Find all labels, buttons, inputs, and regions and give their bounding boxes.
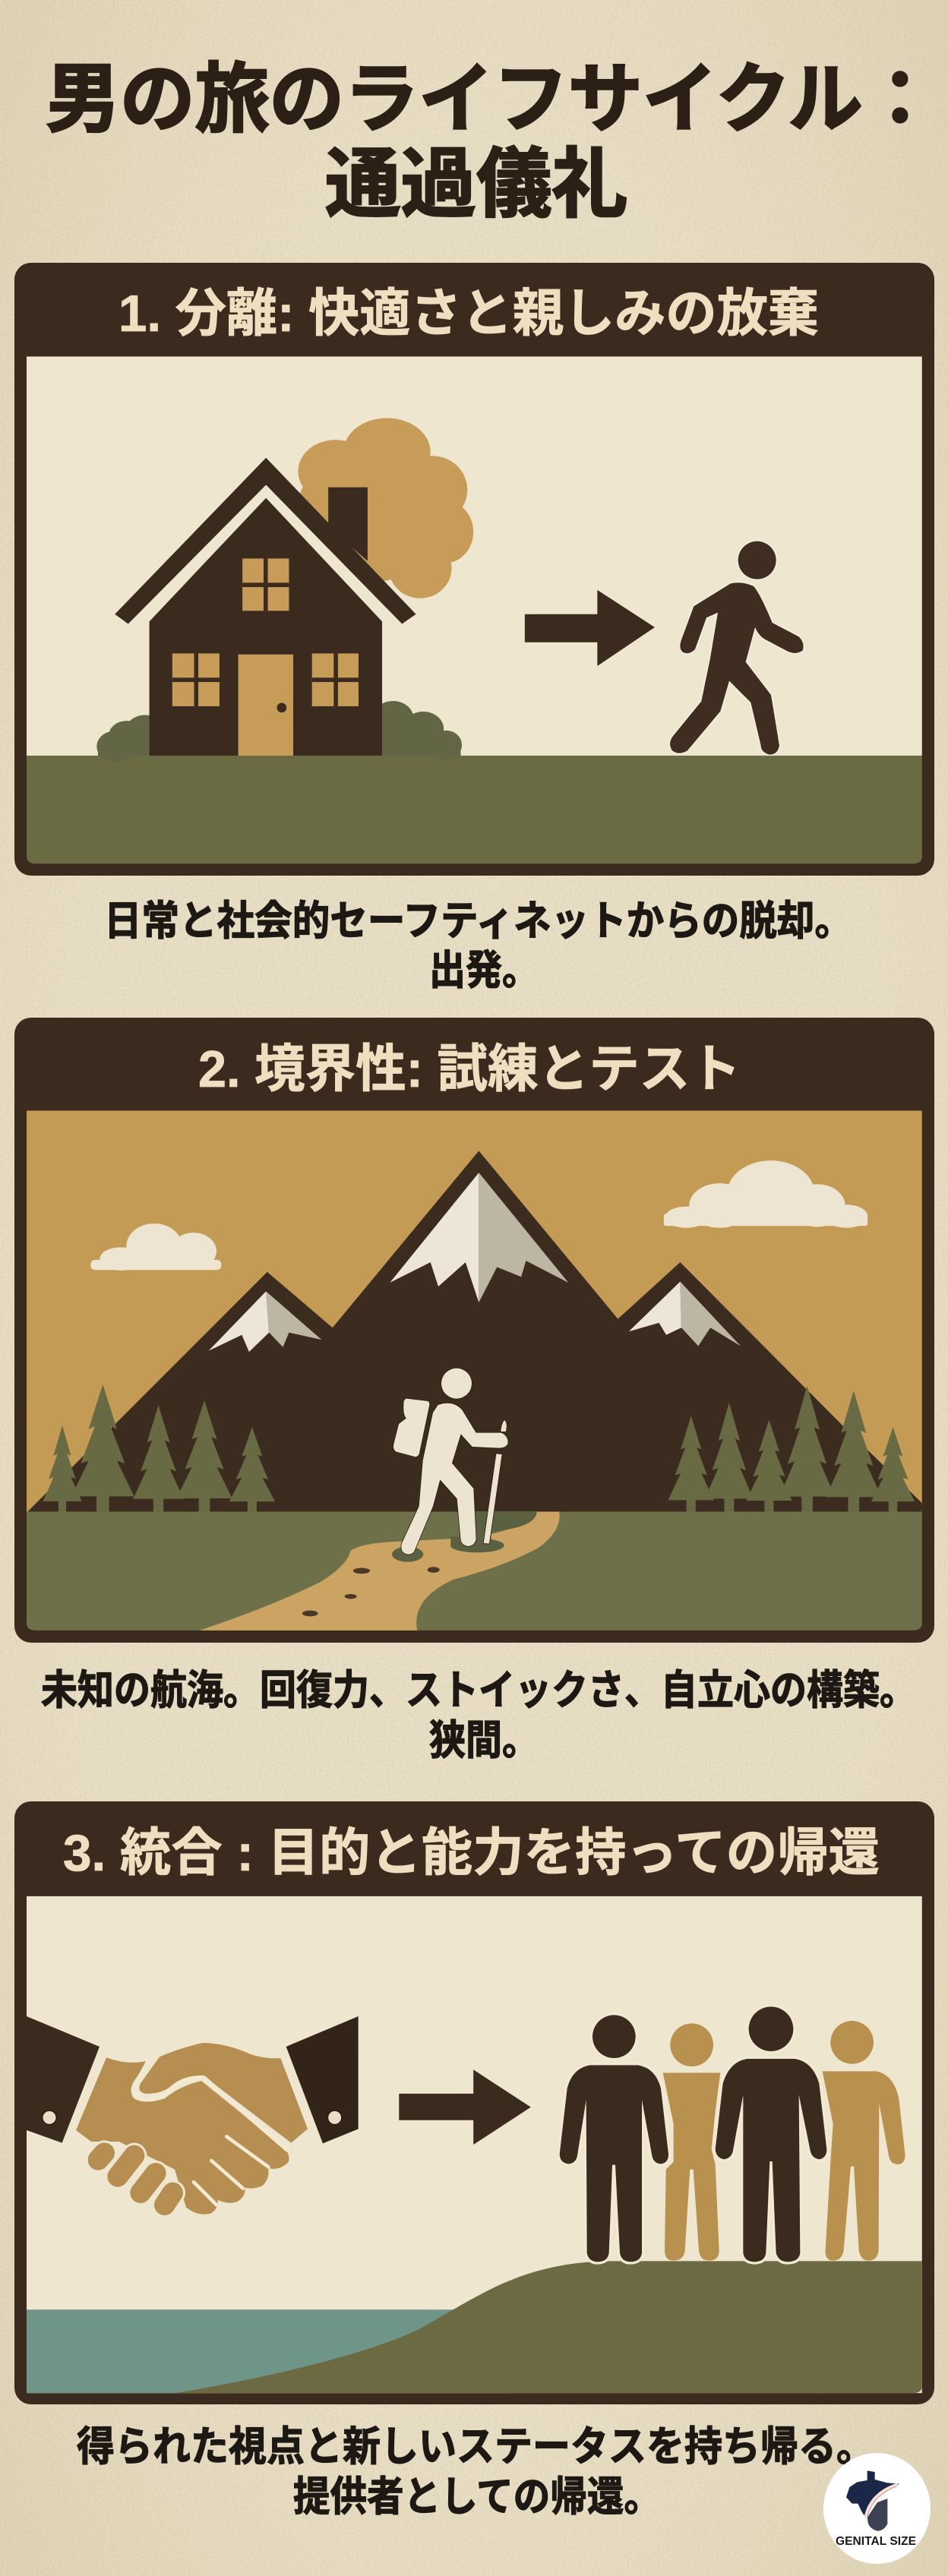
land	[175, 2261, 922, 2393]
panel: 1 separation	[14, 263, 934, 876]
title	[46, 57, 937, 227]
text: separation description: 出発。	[429, 948, 539, 993]
icon: house	[115, 458, 416, 756]
trail	[200, 1512, 560, 1631]
dark figures	[560, 2006, 826, 2262]
panel frame	[14, 263, 934, 876]
panel: 2 liminality	[14, 1018, 934, 1643]
left cuff	[27, 2016, 100, 2143]
text: liminality description	[41, 1668, 916, 1763]
ground	[27, 1512, 922, 1631]
panel: 3 integration	[14, 1801, 934, 2404]
heading: integration: 3. 統合 : 目的と能力を持っての帰還	[63, 1824, 880, 1882]
left hand	[76, 2057, 289, 2215]
ground	[27, 756, 922, 863]
icon: bushes	[96, 701, 462, 762]
text: integration description: 得られた視点と新しいステータスを持ち帰る。	[77, 2424, 874, 2470]
icon: tree behind house	[296, 418, 473, 598]
arrow	[399, 2069, 531, 2145]
text: separation description	[104, 898, 852, 993]
icon: torso with tape	[846, 2470, 899, 2531]
text: integration description	[77, 2424, 874, 2520]
icon: trees	[43, 1384, 915, 1512]
sky	[27, 1110, 922, 1513]
thumb and finger lines	[134, 2062, 287, 2150]
text: separation description: 日常と社会的セーフティネットからの脱却。	[104, 898, 852, 944]
logo badge	[823, 2453, 931, 2564]
logo text: GENITAL SIZE	[836, 2535, 916, 2548]
text: liminality description: 狭間。	[429, 1718, 539, 1763]
icon: hiker	[392, 1368, 537, 1562]
icon: handshake	[27, 2016, 359, 2215]
right cuff	[286, 2016, 359, 2143]
heading: separation: 1. 分離: 快適さと親しみの放棄	[118, 285, 819, 343]
hiker ground shadows	[392, 1511, 537, 1562]
icon: snow caps	[209, 1173, 741, 1352]
title: 男の旅のライフサイクル：	[46, 57, 937, 142]
hiker figure	[393, 1368, 508, 1555]
scene: return and community	[27, 1896, 922, 2393]
text: integration description: 提供者としての帰還。	[293, 2474, 661, 2520]
icon: walking man	[670, 541, 804, 755]
scene: mountains and hiker	[27, 1110, 922, 1631]
panel frame	[14, 1801, 934, 2404]
icon: clouds	[90, 1160, 867, 1271]
icon: mountains	[27, 1151, 922, 1513]
arrow	[525, 590, 655, 666]
right hand	[139, 2043, 308, 2143]
left fingers	[98, 2062, 287, 2205]
tan figures	[663, 2021, 905, 2261]
icon: group of people	[560, 2006, 905, 2262]
panel frame	[14, 1018, 934, 1643]
scene: leaving home	[27, 356, 922, 863]
title: 通過儀礼	[325, 142, 627, 227]
trail footprints	[302, 1567, 440, 1616]
heading: liminality: 2. 境界性: 試練とテスト	[198, 1040, 741, 1098]
water	[27, 2309, 510, 2393]
